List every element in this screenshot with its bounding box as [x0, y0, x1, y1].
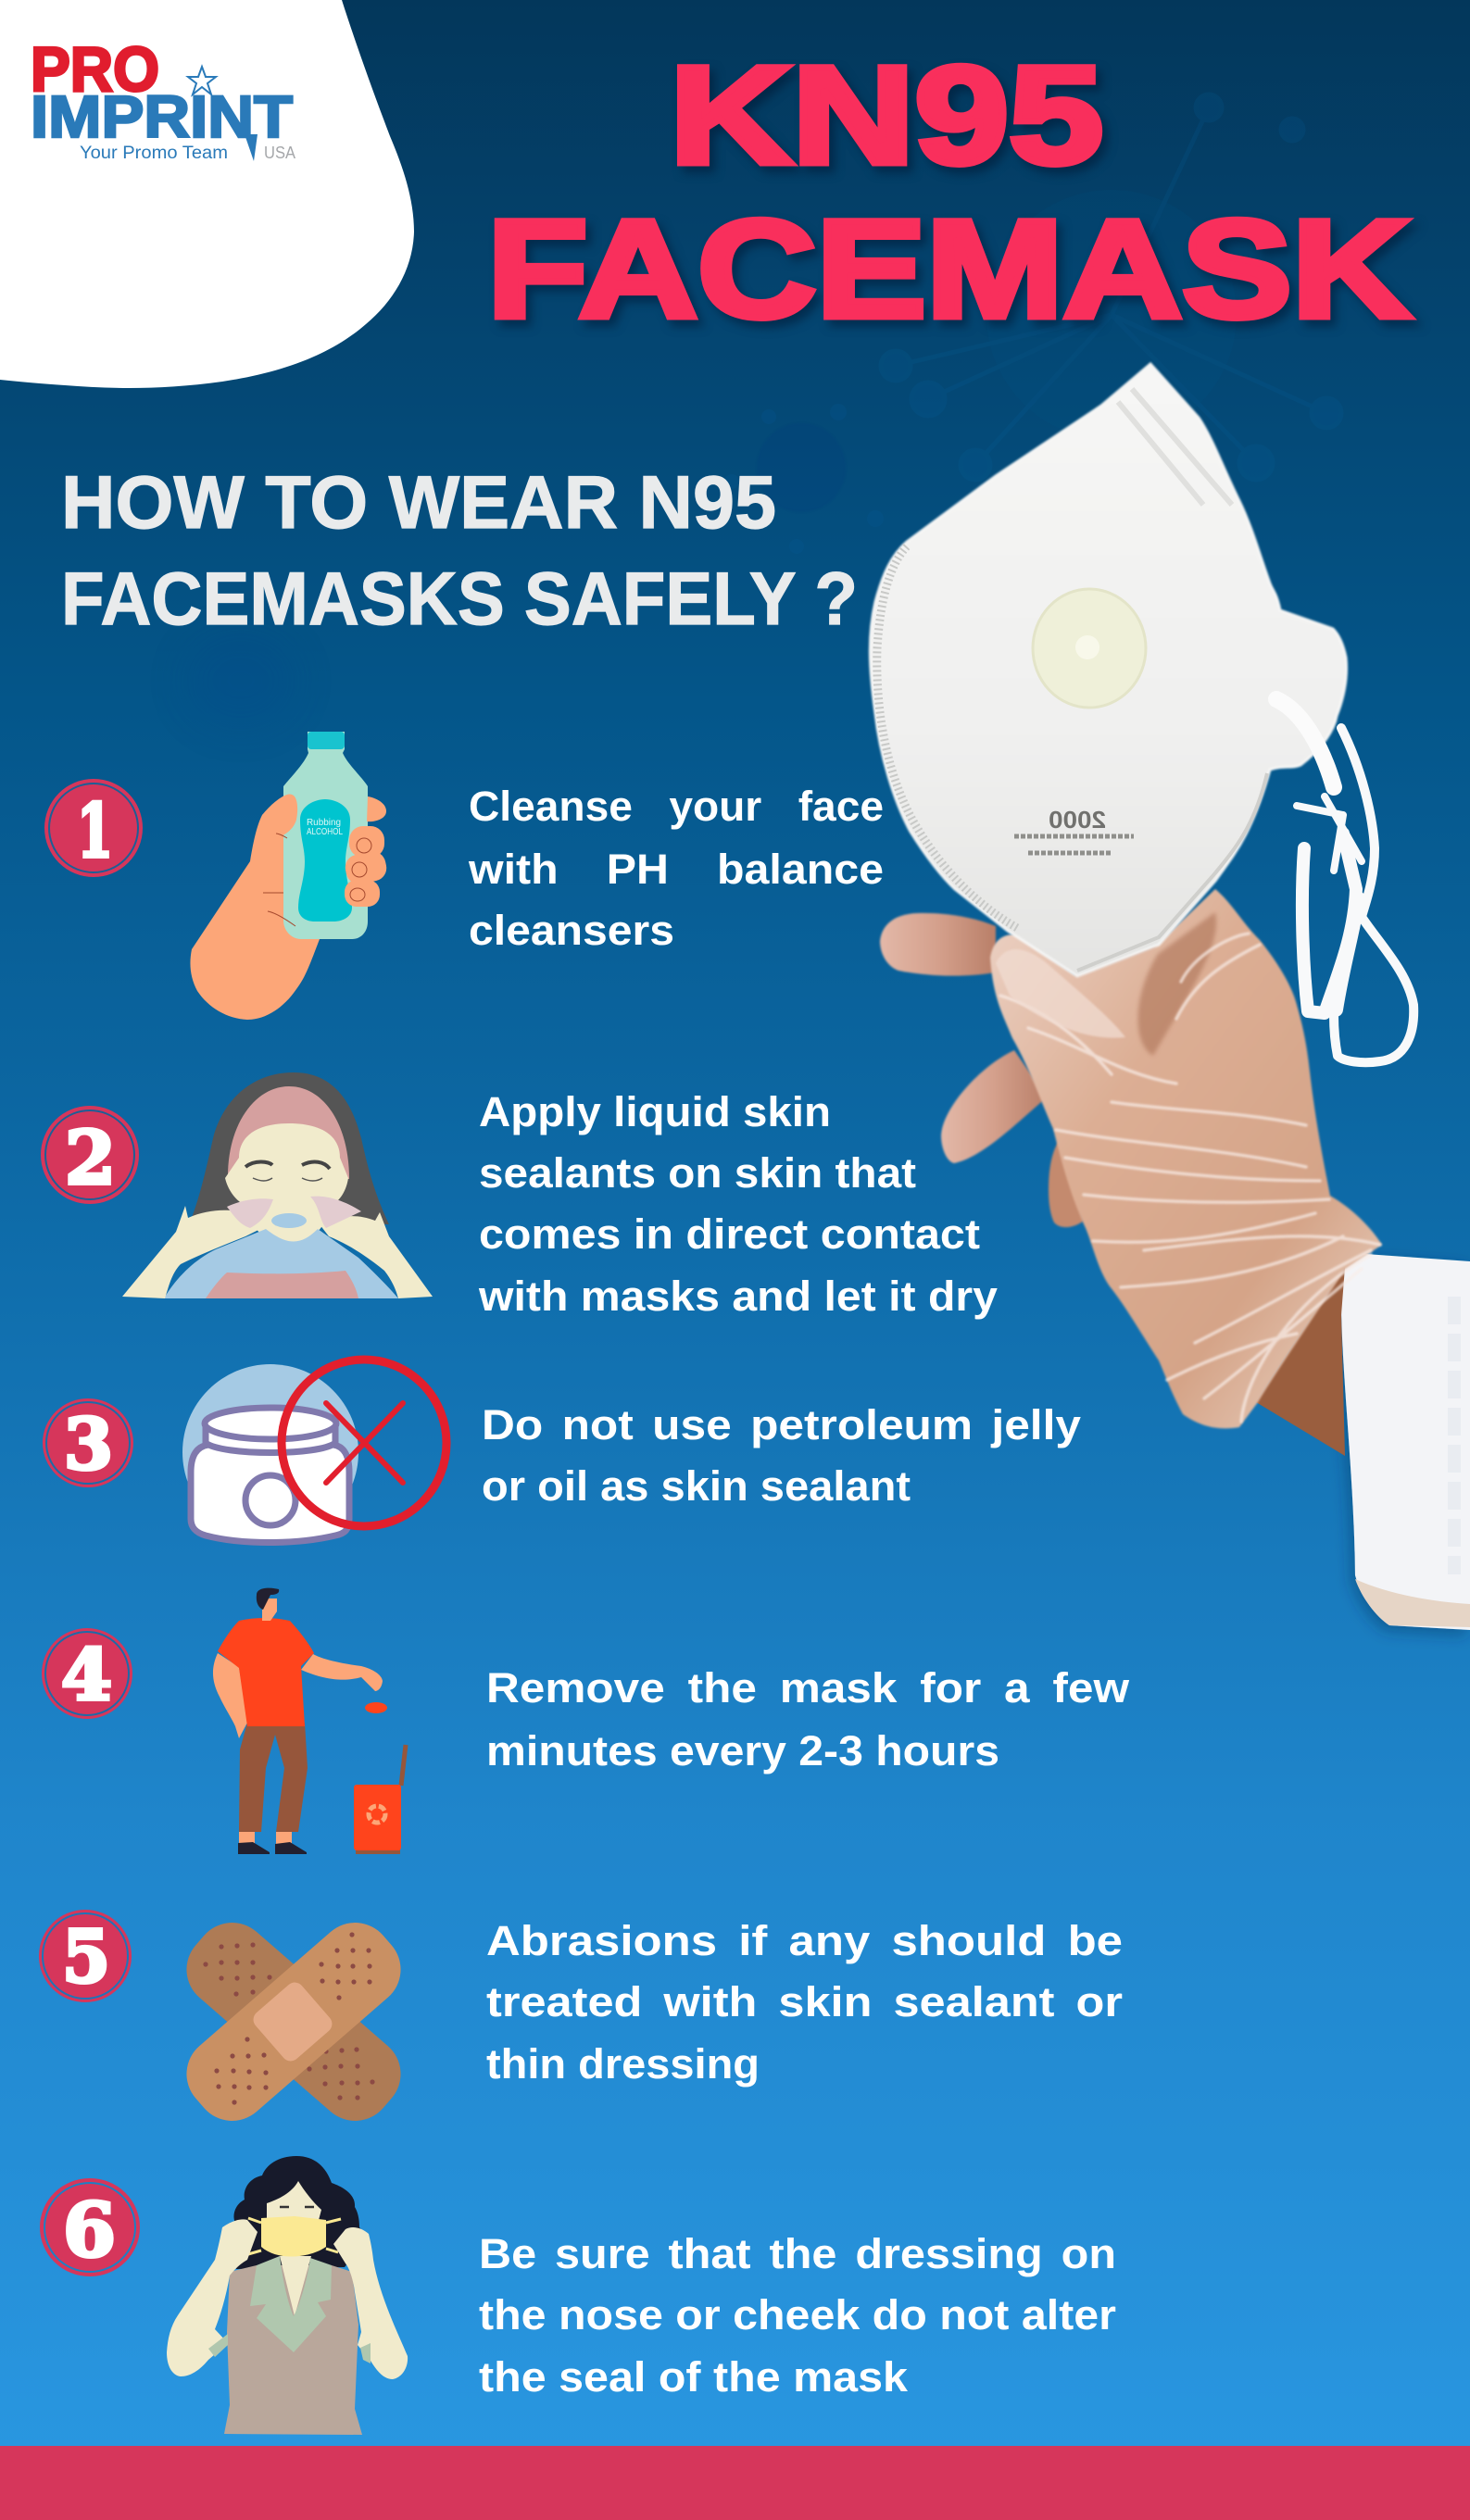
finger 2 [941, 1050, 1047, 1163]
step 3 text: Do not use petroleum jelly [482, 1401, 1081, 1448]
icon: crossed-out jar [182, 1360, 446, 1543]
step 6 text: the nose or cheek do not alter [479, 2291, 1116, 2338]
badge 2 [41, 1106, 139, 1204]
mask body [870, 364, 1347, 976]
step 1 text: cleansers [469, 907, 674, 954]
glove wrinkles [1000, 934, 1380, 1422]
badge 4 [42, 1628, 132, 1719]
hand in glove [990, 889, 1382, 1428]
badge 5: 5 [62, 1915, 110, 2000]
footer bar [0, 2446, 1470, 2520]
finger 3 [1049, 1137, 1084, 1227]
bottle label text: Rubbing [307, 817, 341, 828]
sleeve folds [1355, 1297, 1470, 1627]
icon: hand holding bottle: ALCOHOL [307, 826, 343, 837]
logo: IMPRINT: IMPRINT [31, 83, 293, 150]
step 2 [41, 1072, 998, 1320]
step 1 text [468, 783, 884, 954]
logo: PRO: PRO [31, 34, 159, 105]
facemask [870, 364, 1347, 976]
step 2 text: sealants on skin that [479, 1149, 916, 1197]
valve [1033, 589, 1146, 708]
photo: hand holding mask [870, 364, 1470, 1630]
mask print [1014, 806, 1134, 853]
step 3 text: or oil as skin sealant [482, 1462, 911, 1510]
logo [31, 34, 295, 163]
step 5 [39, 1908, 1123, 2136]
icon: hand holding bottle [190, 732, 389, 1020]
step 1 text: Cleanse your face [469, 783, 884, 830]
icon: crossed bandages [171, 1908, 416, 2136]
background virus pattern [185, 94, 1341, 727]
badge 1 [44, 779, 143, 877]
step 1 [44, 732, 884, 1020]
heading: FACEMASKS SAFELY ? [61, 558, 858, 641]
badge 1: 1 [77, 787, 113, 874]
middle finger [1074, 945, 1158, 1019]
step 5 text [486, 1917, 1123, 2087]
sleeve [1341, 1253, 1470, 1630]
step 4 text [486, 1664, 1130, 1774]
step 5 text: treated with skin sealant or [486, 1978, 1123, 2025]
mask print: 2000 [1049, 806, 1106, 834]
badge 3 [43, 1398, 133, 1487]
red cross [326, 1403, 403, 1483]
white logo blob [0, 0, 414, 388]
palm shadow near fingers [1138, 912, 1216, 1056]
step 2 text: comes in direct contact [479, 1210, 980, 1258]
step 6 text [479, 2230, 1116, 2401]
valve centre [1075, 635, 1099, 659]
logo: tagline: Your Promo Team [80, 144, 228, 163]
badge 5 [39, 1910, 132, 2002]
strap [1297, 728, 1413, 1062]
icon: woman applying sealant [122, 1072, 433, 1298]
badge 2: 2 [65, 1114, 116, 1201]
nose strip [1118, 389, 1232, 505]
step 5 text: thin dressing [486, 2040, 760, 2087]
finger 1 [880, 913, 996, 976]
badge 3: 3 [64, 1403, 113, 1486]
mask bottom seam [1077, 773, 1267, 971]
step 4 text: Remove the mask for a few [486, 1664, 1130, 1711]
step 3 text [482, 1401, 1081, 1510]
thumb highlight [996, 949, 1125, 1038]
logo: star [188, 67, 216, 94]
badge 6 [40, 2178, 140, 2276]
title line 2: FACEMASK [487, 191, 1411, 346]
title [487, 37, 1411, 346]
logo: USA: USA [264, 144, 295, 162]
badge 6: 6 [63, 2187, 116, 2274]
icon: man disposing mask in bin [213, 1588, 406, 1854]
step 4 text: minutes every 2-3 hours [486, 1727, 999, 1774]
step 2 text [478, 1088, 998, 1320]
step 2 text: Apply liquid skin [479, 1088, 831, 1135]
strap band over mask [1276, 699, 1334, 787]
title line 1: KN95 [670, 37, 1103, 193]
heading: HOW TO WEAR N95 [61, 461, 776, 545]
bin lid [401, 1745, 406, 1786]
badge 4: 4 [61, 1634, 112, 1716]
bin [354, 1785, 401, 1850]
step 6 text: Be sure that the dressing on [479, 2230, 1116, 2277]
falling mask [365, 1702, 387, 1713]
step 2 text: with masks and let it dry [478, 1273, 998, 1320]
mask edge seam [877, 546, 1019, 929]
step 3 [43, 1360, 1081, 1543]
step 4 [42, 1588, 1130, 1854]
step 6 text: the seal of the mask [479, 2353, 909, 2401]
step 5 text: Abrasions if any should be [486, 1917, 1123, 1964]
wrist [1256, 1267, 1345, 1456]
red prohibition circle [282, 1360, 446, 1526]
icon: woman putting on mask [167, 2156, 408, 2435]
step 6 [40, 2156, 1116, 2435]
step 1 text: with PH balance [468, 846, 884, 893]
logo: N tail [245, 134, 258, 161]
heading [61, 461, 858, 641]
